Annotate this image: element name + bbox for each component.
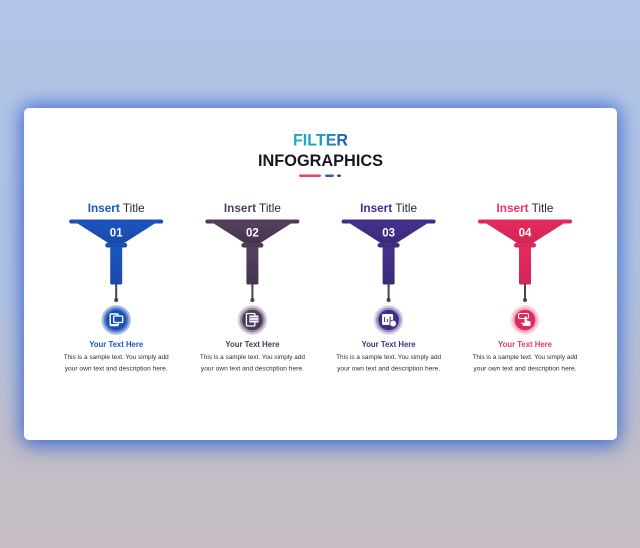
column 2 bbox=[200, 201, 305, 373]
column 2 icon bbox=[238, 305, 267, 335]
column 3 icon bbox=[374, 305, 403, 335]
column 3 body bbox=[336, 354, 441, 373]
column 4 body: your own text and description here. bbox=[474, 366, 577, 373]
column 4 connector bbox=[523, 284, 527, 302]
title: INFOGRAPHICS bbox=[258, 151, 383, 170]
column 3 body: This is a sample text. You simply add bbox=[336, 354, 441, 361]
column 3 funnel bbox=[342, 220, 436, 284]
column 4 funnel bbox=[478, 220, 572, 284]
title: FILTER bbox=[293, 130, 348, 150]
column 1 icon bbox=[102, 305, 131, 335]
column 2 body bbox=[200, 354, 305, 373]
card bbox=[24, 108, 617, 440]
column 1 body: your own text and description here. bbox=[65, 366, 168, 373]
column 4 subheading: Your Text Here bbox=[498, 339, 552, 349]
column 3 bbox=[336, 201, 441, 373]
column 2 number: 02 bbox=[246, 228, 259, 240]
title bbox=[258, 130, 383, 170]
column 2 connector bbox=[250, 284, 254, 302]
column 2 heading: Insert Title bbox=[224, 201, 281, 215]
column 1 subheading: Your Text Here bbox=[89, 339, 143, 349]
column 3 heading: Insert Title bbox=[360, 201, 417, 215]
column 4 body bbox=[472, 354, 578, 373]
column 4 heading: Insert Title bbox=[496, 201, 554, 215]
column 1 number: 01 bbox=[110, 228, 123, 240]
column 4 number: 04 bbox=[519, 228, 532, 240]
column 2 body: your own text and description here. bbox=[201, 366, 304, 373]
column 4 icon bbox=[510, 305, 540, 335]
column 1 body: This is a sample text. You simply add bbox=[64, 354, 169, 361]
card glow bbox=[22, 106, 619, 445]
column 4 bbox=[472, 201, 578, 373]
column 2 subheading: Your Text Here bbox=[225, 339, 280, 349]
column 4 body: This is a sample text. You simply add bbox=[472, 354, 578, 361]
column 3 connector bbox=[387, 284, 391, 302]
column 2 body: This is a sample text. You simply add bbox=[200, 354, 305, 361]
column 3 subheading: Your Text Here bbox=[362, 339, 416, 349]
column 1 connector bbox=[114, 284, 118, 302]
column 1 heading: Insert Title bbox=[88, 201, 145, 215]
column 2 funnel bbox=[205, 220, 299, 284]
column 1 bbox=[64, 201, 169, 373]
column 1 body bbox=[64, 354, 169, 373]
column 3 number: 03 bbox=[382, 228, 395, 240]
column 3 body: your own text and description here. bbox=[337, 366, 440, 373]
column 1 funnel bbox=[69, 220, 163, 284]
title divider bbox=[299, 174, 341, 177]
